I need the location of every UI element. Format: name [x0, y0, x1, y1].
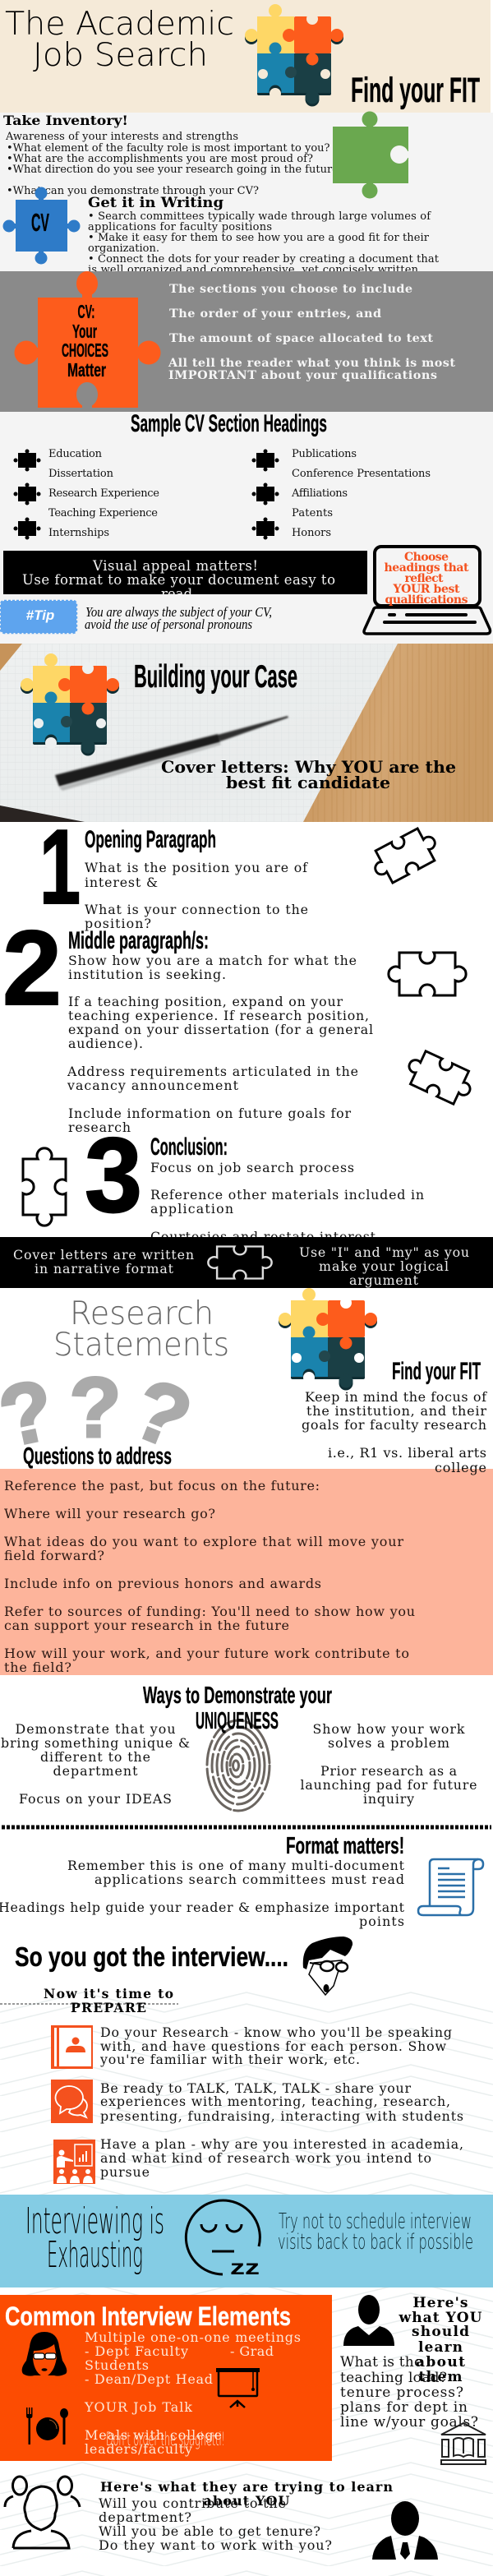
list: right column: Honors	[292, 527, 331, 539]
item: have a plan	[53, 2136, 463, 2184]
page background	[0, 113, 493, 644]
text block: teaching experience. If research position,	[68, 1008, 369, 1023]
text block: find your fit: college	[435, 1460, 486, 1475]
icon: orange CV puzzle piece: CV:	[77, 301, 95, 322]
heading	[100, 2479, 393, 2509]
text block: position?	[85, 916, 151, 931]
title: Research	[70, 1295, 214, 1332]
icons: small puzzle bullets	[13, 449, 279, 539]
number 1: 1	[39, 808, 81, 926]
text block: The amount of space allocated to text	[169, 331, 433, 345]
subheading: Cover letters: Why YOU are the	[161, 758, 456, 777]
icon: four piece puzzle	[245, 4, 343, 107]
text block left: department	[53, 1763, 138, 1779]
white panel: cover letters	[0, 822, 493, 1987]
text block question	[340, 2354, 478, 2431]
text block right: solves a problem	[328, 1735, 449, 1751]
heading	[143, 1683, 332, 1734]
banner: interviewing is exhausting	[0, 2195, 493, 2287]
subheading	[0, 1986, 178, 2015]
text block: Headings help guide your reader & emphasize important	[0, 1900, 405, 1915]
heading: about	[416, 2354, 465, 2371]
text block	[150, 1160, 424, 1244]
icon: library	[441, 2423, 486, 2464]
text block	[99, 2495, 332, 2553]
icon: projector screen	[216, 2368, 260, 2407]
text block: find your fit: goals for faculty research	[302, 1417, 486, 1433]
text block: All tell the reader what you think is most	[168, 356, 455, 370]
panel: so you got the interview	[0, 1937, 352, 2015]
heading: should	[412, 2324, 469, 2340]
text block	[88, 210, 440, 276]
heading: Here's	[412, 2295, 468, 2311]
subheading: best fit candidate	[226, 773, 390, 792]
text block: Remember this is one of many multi-document	[67, 1858, 405, 1873]
heading: Questions to address	[23, 1443, 172, 1470]
title	[53, 1295, 229, 1364]
text block	[99, 2024, 452, 2067]
heading: Exhausting	[47, 2234, 143, 2276]
text block	[85, 860, 308, 931]
text block question: plans for dept in	[340, 2399, 468, 2416]
icon: outline puzzle vertical	[23, 1148, 66, 1226]
text block	[84, 2329, 301, 2457]
icon: laptop with callout text: YOUR best	[393, 583, 460, 596]
text block question: teaching load?	[340, 2370, 447, 2386]
text block: Students	[85, 2357, 149, 2373]
icon: address book	[51, 2025, 93, 2069]
list: right column: Patents	[292, 507, 333, 519]
text block: expand on your dissertation (for a general	[68, 1022, 373, 1037]
text block: find your fit	[302, 1389, 487, 1475]
icon: laptop with callout text: headings that	[385, 561, 469, 575]
text block: Do they want to work with you?	[99, 2537, 332, 2553]
text block: What is your connection to the	[85, 902, 308, 917]
heading: Building your Case	[134, 659, 297, 695]
text block	[67, 953, 373, 1135]
panel: get it in writing	[3, 187, 440, 276]
callout: visual appeal matters: read	[161, 586, 192, 602]
chevron background	[0, 1987, 493, 2576]
icon: blue CV puzzle piece	[3, 187, 81, 265]
heading: UNIQUENESS	[196, 1708, 279, 1734]
callout: tip: #Tip	[26, 607, 54, 623]
heading: Ways to Demonstrate your	[143, 1683, 332, 1709]
text block left: different to the	[40, 1749, 150, 1765]
text block	[4, 1478, 415, 1675]
icon: outline puzzle	[208, 1246, 272, 1279]
title: The Academic	[5, 6, 234, 43]
text block right: Show how your work	[312, 1721, 465, 1737]
icon: outline puzzle	[367, 824, 443, 887]
icon: presentation	[53, 2140, 95, 2184]
header panel	[0, 0, 491, 113]
heading: So you got the interview....	[15, 1941, 288, 1972]
text block: applications search committees must read	[94, 1872, 404, 1887]
text block: points	[359, 1914, 404, 1929]
text block: Address requirements articulated in the	[67, 1064, 358, 1079]
panel: common interview elements	[0, 2295, 332, 2461]
icons: question marks: ?	[120, 1360, 204, 1468]
list: left column: Teaching Experience	[48, 507, 158, 519]
heading: Take Inventory!	[3, 113, 128, 128]
text block left: bring something unique &	[1, 1735, 190, 1751]
title	[5, 6, 234, 74]
text block: Focus on job search process	[150, 1160, 354, 1175]
panel: ways to demonstrate uniqueness	[1, 1683, 477, 1811]
icon: speech bubbles	[51, 2080, 93, 2123]
panel: questions to address	[0, 1469, 493, 1675]
heading: learn	[418, 2339, 463, 2356]
title: Statements	[53, 1327, 229, 1364]
text block: is well organized and comprehensive, yet concisely written	[88, 264, 419, 276]
panel: format matters	[0, 1833, 483, 1929]
text block: IMPORTANT about your qualifications	[168, 368, 437, 382]
text block left: Focus on your IDEAS	[19, 1791, 172, 1807]
text block question: line w/your goals?	[340, 2414, 478, 2431]
panel: research statements header	[0, 1288, 481, 1470]
text block: Reference other materials included in	[150, 1187, 424, 1203]
number 3: 3	[85, 1116, 142, 1235]
text block: The sections you choose to include	[169, 282, 412, 296]
icon: sleeping face	[186, 2200, 260, 2279]
heading	[398, 2295, 482, 2385]
icon: orange CV puzzle piece	[15, 271, 161, 409]
text right	[299, 1244, 469, 1288]
text block: Will you be able to get tenure?	[99, 2523, 320, 2539]
text block: can support your research in the future	[4, 1618, 289, 1633]
list: right column: Publications	[292, 448, 357, 460]
text block: research	[68, 1119, 131, 1135]
callout: visual appeal matters: Use format to make your document easy to	[22, 572, 335, 588]
text block: field forward?	[4, 1548, 104, 1563]
text block right	[301, 1721, 477, 1807]
text right: argument	[349, 1272, 419, 1288]
text block: If a teaching position, expand on your	[68, 994, 343, 1009]
text block: Awareness of your interests and strengths	[5, 131, 238, 143]
title: Job Search	[33, 37, 208, 74]
panel: sample CV section headings	[13, 410, 431, 539]
heading: what YOU	[398, 2310, 482, 2326]
text block left	[1, 1721, 190, 1807]
text left: in narrative format	[35, 1261, 174, 1276]
note: spaghetti: Don't order the spaghetti!	[106, 2430, 225, 2450]
text block: interest &	[85, 875, 158, 890]
text block: experiences with mentoring, teaching, research,	[100, 2094, 450, 2109]
text block: Do your Research - know who you'll be speaking	[100, 2024, 452, 2040]
text right: make your logical	[319, 1258, 449, 1274]
text block: find your fit: the institution, and their	[306, 1403, 486, 1419]
icon: laptop with callout text	[364, 547, 490, 634]
text block	[100, 2080, 463, 2124]
text block: - Grad	[230, 2343, 274, 2359]
icon: sleeping face: zz	[230, 2255, 260, 2279]
text block: leaders/faculty	[85, 2441, 192, 2457]
text block: •What direction do you see your research going in the future?	[7, 164, 344, 176]
text block: Where will your research go?	[4, 1506, 215, 1521]
text block	[5, 131, 344, 197]
icon: four piece puzzle	[279, 1288, 377, 1391]
text block: Meals with college	[85, 2427, 222, 2443]
step 1: opening paragraph	[39, 808, 443, 931]
icon: group of people	[5, 2477, 80, 2548]
text block: applications for faculty positions	[88, 221, 272, 233]
text left: Cover letters are written	[13, 1247, 194, 1263]
item: be ready to talk	[51, 2080, 463, 2124]
callout: tip: avoid the use of personal pronouns	[85, 616, 252, 632]
icons: question marks: ?	[69, 1360, 122, 1456]
subheading: Now it's time to	[44, 1986, 173, 2001]
step 3: conclusion	[23, 1116, 424, 1244]
text block: Be ready to TALK, TALK, TALK - share your	[100, 2080, 411, 2096]
number 2: 2	[2, 909, 62, 1027]
callout: tip	[1, 601, 272, 633]
subheading: PREPARE	[71, 2000, 146, 2015]
list: left column: Dissertation	[48, 468, 114, 480]
text block: the field?	[4, 1660, 71, 1675]
text block: YOUR Job Talk	[84, 2399, 192, 2415]
text block: Will you contribute to the	[99, 2495, 286, 2511]
list: right column: Conference Presentations	[292, 468, 431, 480]
list: left column: Education	[48, 448, 103, 460]
text block	[0, 1858, 405, 1929]
text block: department?	[99, 2509, 191, 2525]
list: left column	[48, 448, 159, 539]
icon: orange CV puzzle piece: Matter	[67, 359, 106, 381]
panel: what they are trying to learn	[5, 2477, 438, 2560]
text block: • Connect the dots for your reader by creating a document that	[88, 253, 440, 265]
text block: organization.	[88, 242, 159, 255]
panel: what you should learn about them	[340, 2295, 486, 2464]
text left	[13, 1247, 194, 1276]
panel: take inventory	[3, 112, 409, 199]
text block	[168, 282, 455, 382]
icon: woman with glasses	[22, 2332, 67, 2377]
subheading	[161, 758, 456, 792]
text block: Refer to sources of funding: You'll need to show how you	[4, 1604, 415, 1619]
list: right column: Affiliations	[291, 487, 348, 500]
text block	[278, 2209, 473, 2255]
text block: •What can you demonstrate through your CV?	[7, 185, 259, 197]
icon: man silhouette	[343, 2295, 394, 2346]
heading: Conclusion:	[150, 1133, 228, 1161]
callout: tip: You are always the subject of your CV,	[85, 604, 272, 620]
callout: visual appeal matters	[3, 551, 367, 602]
text block: Courtesies and restate interest	[150, 1229, 376, 1244]
text block: • Search committees typically wade through large volumes of	[88, 210, 431, 223]
list: right column	[291, 448, 431, 539]
text block: vacancy announcement	[67, 1078, 239, 1093]
text block: pursue	[100, 2164, 150, 2180]
text right: Use "I" and "my" as you	[299, 1244, 469, 1260]
heading: Here's what they are trying to learn	[100, 2479, 393, 2495]
heading: Sample CV Section Headings	[131, 410, 327, 437]
text block: What ideas do you want to explore that will move your	[4, 1534, 403, 1549]
text block: presenting, fundraising, interacting with students	[100, 2108, 463, 2124]
heading: Middle paragraph/s:	[68, 927, 209, 954]
text block: •What are the accomplishments you are most proud of?	[7, 153, 313, 165]
icon: green puzzle piece	[333, 112, 409, 199]
icon: orange CV puzzle piece: CHOICES	[62, 339, 108, 361]
icon: plate and cutlery	[26, 2407, 68, 2444]
text block: Have a plan - why are you interested in academia,	[100, 2136, 463, 2152]
icon: man with glasses	[303, 1937, 352, 1995]
icon: outline puzzle	[389, 953, 466, 995]
text block left: Demonstrate that you	[15, 1721, 176, 1737]
text block	[100, 2136, 463, 2180]
text block: What is the position you are of	[85, 860, 308, 875]
icon: laptop with callout text: qualifications	[385, 593, 468, 607]
icon: orange CV puzzle piece: Your	[72, 321, 97, 342]
text block question: tenure process?	[340, 2384, 463, 2401]
heading: Get it in Writing	[88, 195, 223, 211]
heading	[25, 2200, 164, 2276]
heading: them	[419, 2369, 462, 2385]
icons: question marks	[0, 1360, 204, 1468]
heading: about YOU	[204, 2493, 290, 2509]
panel: building your case photo	[0, 644, 493, 822]
callout: visual appeal matters: Visual appeal matters!	[92, 558, 258, 574]
icon: laptop with callout text: reflect	[404, 572, 444, 585]
text block: institution is seeking.	[68, 967, 226, 982]
text block question: What is the	[340, 2354, 422, 2371]
text block: find your fit: Keep in mind the focus of	[305, 1389, 487, 1405]
heading: Interviewing is	[25, 2200, 164, 2242]
icon: man in suit	[372, 2501, 438, 2560]
text block: audience).	[68, 1036, 143, 1051]
text block: - Dean/Dept Head	[85, 2371, 213, 2387]
banner: cover letter format	[0, 1237, 493, 1288]
text block: with, and have questions for each person. Show	[100, 2038, 446, 2054]
panel: your choices matter	[0, 271, 493, 412]
text block: Show how you are a match for what the	[68, 953, 357, 968]
text block: - Dept Faculty	[85, 2343, 188, 2359]
item: do your research	[51, 2024, 452, 2069]
icon: outline puzzle rotated	[402, 1047, 477, 1108]
text block: The order of your entries, and	[169, 307, 381, 321]
heading: Format matters!	[286, 1833, 404, 1859]
text block: Include info on previous honors and awards	[4, 1576, 321, 1591]
text block: Multiple one-on-one meetings	[85, 2329, 301, 2345]
text block: application	[150, 1201, 233, 1216]
text block right: launching pad for future	[301, 1777, 477, 1793]
text block right: Prior research as a	[320, 1763, 457, 1779]
heading: Opening Paragraph	[85, 826, 216, 853]
text block: • Make it easy for them to see how you are a good fit for their	[88, 232, 430, 244]
icon: four piece puzzle	[21, 653, 119, 756]
heading: Common Interview Elements	[5, 2301, 291, 2331]
step 2: middle paragraphs	[2, 909, 477, 1135]
list: left column: Internships	[48, 527, 109, 539]
icon: blue CV puzzle piece: CV	[31, 208, 49, 237]
text block: find your fit: i.e., R1 vs. liberal arts	[328, 1445, 486, 1461]
list: left column: Research Experience	[48, 487, 159, 500]
icon: fingerprint	[207, 1720, 270, 1811]
text block right: inquiry	[363, 1791, 414, 1807]
icon: scroll document	[418, 1859, 483, 1915]
text block: you're familiar with their work, etc.	[99, 2052, 360, 2067]
text block: and what kind of research work you intend to	[100, 2150, 431, 2166]
text block: Include information on future goals for	[68, 1106, 351, 1121]
photo: notebook, pen and wood desk	[0, 644, 493, 822]
icon: laptop with callout text: Choose	[404, 551, 449, 564]
text block: How will your work, and your future work contribute to	[4, 1646, 409, 1661]
text block: •What element of the faculty role is most important to you?	[7, 142, 330, 155]
text block: Reference the past, but focus on the future:	[4, 1478, 320, 1493]
